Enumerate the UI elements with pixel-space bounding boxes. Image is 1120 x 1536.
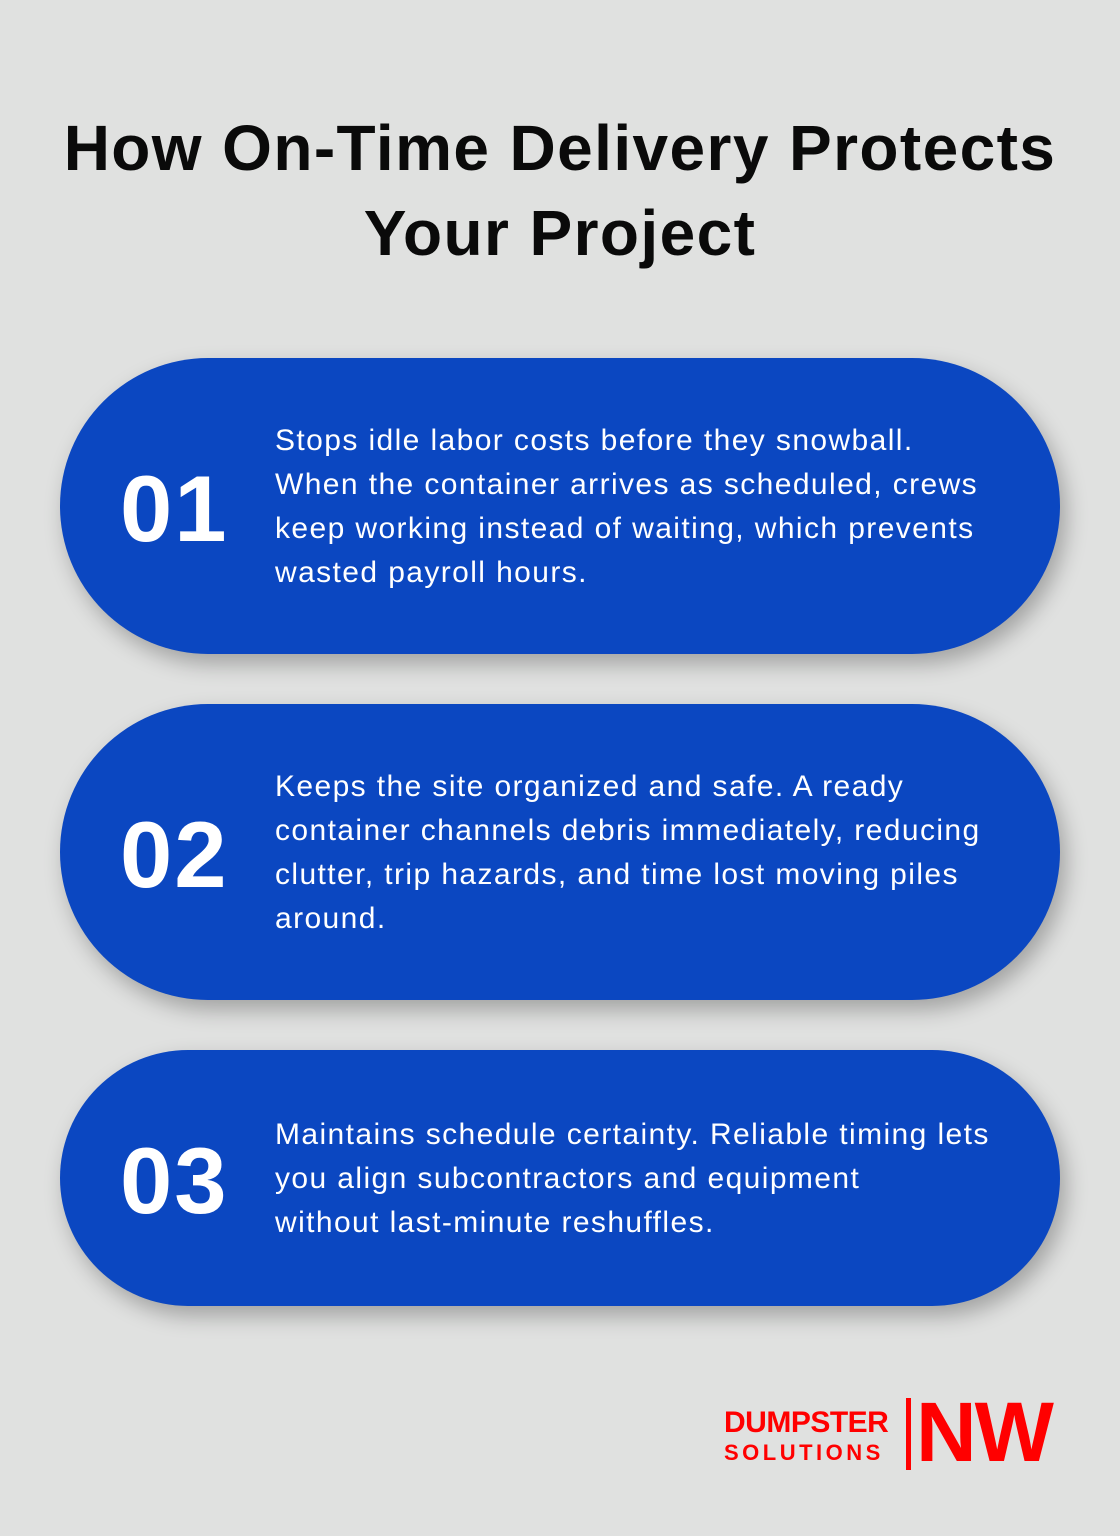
text 02: around. (275, 902, 387, 935)
logo: SOLUTIONS (724, 1440, 884, 1465)
logo: DUMPSTER (724, 1406, 888, 1439)
text 03: without last-minute reshuffles. (275, 1206, 715, 1239)
text 01: Stops idle labor costs before they snowball. (275, 424, 914, 457)
text 01: wasted payroll hours. (275, 556, 588, 589)
text 03 (275, 1118, 990, 1239)
logo: NW (916, 1385, 1052, 1479)
text 03: Maintains schedule certainty. Reliable timing lets (275, 1118, 990, 1151)
panel: item 02 (60, 704, 1060, 1000)
text 02: clutter, trip hazards, and time lost moving piles (275, 858, 959, 891)
number 02: 02 (120, 802, 229, 907)
text 01: keep working instead of waiting, which prevents (275, 512, 974, 545)
logo (724, 1385, 1054, 1479)
text 03: you align subcontractors and equipment (275, 1162, 860, 1195)
text 01: When the container arrives as scheduled, crews (275, 468, 978, 501)
title (64, 112, 1056, 269)
panel: item 03 (60, 1050, 1060, 1306)
number 01: 01 (120, 456, 229, 561)
title: How On-Time Delivery Protects (64, 112, 1056, 184)
text 01 (275, 424, 978, 589)
text 02: container channels debris immediately, reducing (275, 814, 981, 847)
panel: item 01 (60, 358, 1060, 654)
text 02 (275, 770, 981, 935)
title: Your Project (364, 197, 756, 269)
text 02: Keeps the site organized and safe. A ready (275, 770, 904, 803)
number 03: 03 (120, 1128, 229, 1233)
